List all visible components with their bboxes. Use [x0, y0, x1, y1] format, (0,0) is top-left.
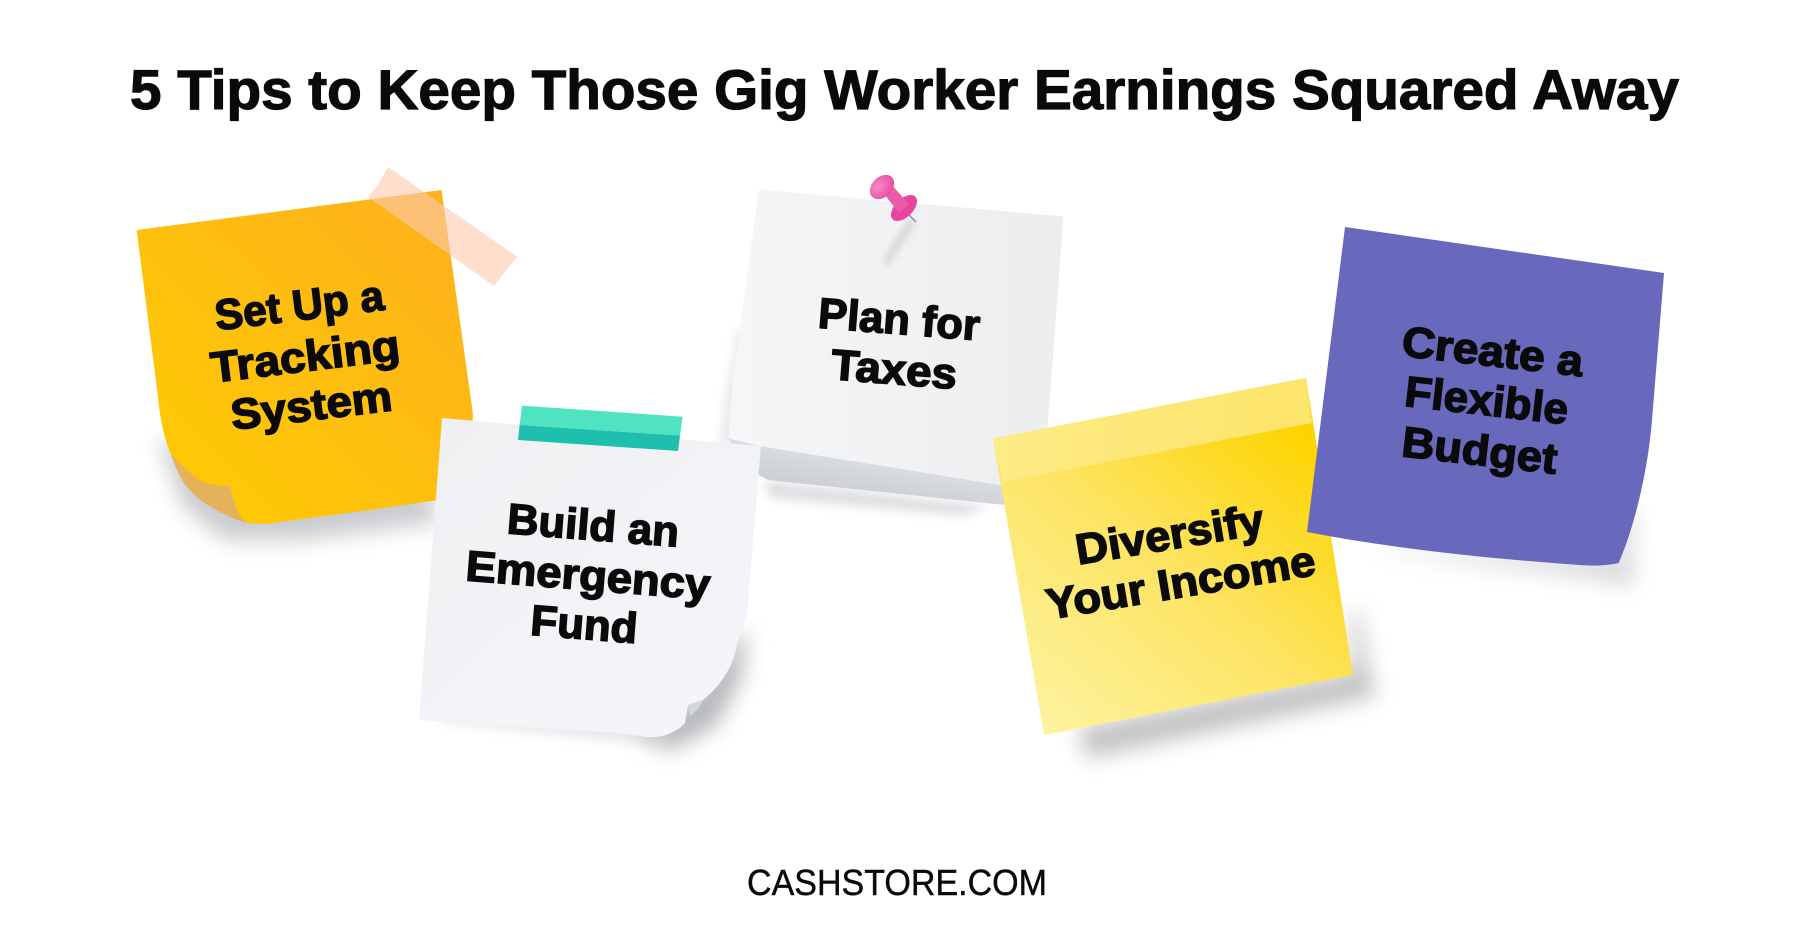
note 1: set up a tracking system — [137, 167, 517, 540]
note 4 text: Diversify — [1072, 496, 1267, 575]
note 2 text: Build an — [505, 495, 681, 557]
note 5: create a flexible budget — [1307, 227, 1664, 586]
note 4 text: Your Income — [1043, 537, 1319, 629]
note 2 text: Emergency — [464, 543, 712, 610]
note 1 text: Set Up a — [212, 272, 388, 340]
note 5 sheet — [1307, 227, 1664, 566]
note 2 sheet — [419, 418, 761, 737]
note 5 text — [1399, 318, 1587, 484]
note 5 text: Flexible — [1402, 368, 1571, 434]
note 3: plan for taxes — [720, 170, 1064, 516]
note 1 text: System — [228, 372, 395, 440]
note 3 pin shadow — [882, 218, 916, 268]
note 2 text: Fund — [529, 597, 639, 653]
note 3 fold — [728, 438, 1005, 505]
note 5 text: Create a — [1399, 318, 1587, 386]
note 3 text: Taxes — [829, 341, 959, 399]
note 2 curl — [688, 700, 703, 716]
note 1 curled back — [170, 452, 262, 523]
note 4 text — [1043, 496, 1319, 629]
note 1 sheet — [137, 190, 473, 524]
note 2 text — [464, 495, 712, 653]
note 1 text: Tracking — [208, 322, 403, 393]
footer: website: CASHSTORE.COM — [747, 862, 1047, 903]
note 2: build an emergency fund — [419, 406, 761, 750]
note 5 text: Budget — [1399, 418, 1560, 484]
icon: push pin — [865, 170, 922, 226]
note 4 sheet — [993, 378, 1353, 735]
note 4 top strip — [993, 378, 1312, 482]
note 4: diversify your income — [993, 378, 1376, 758]
note 2 tape — [518, 406, 683, 451]
note 1 tape — [368, 167, 517, 286]
note 3 text — [816, 290, 982, 399]
note 1 text — [208, 272, 403, 440]
note 3 text: Plan for — [816, 290, 982, 350]
note 3 sheet — [729, 190, 1064, 490]
title: 5 Tips to Keep Those Gig Worker Earnings Squared Away — [130, 58, 1679, 121]
